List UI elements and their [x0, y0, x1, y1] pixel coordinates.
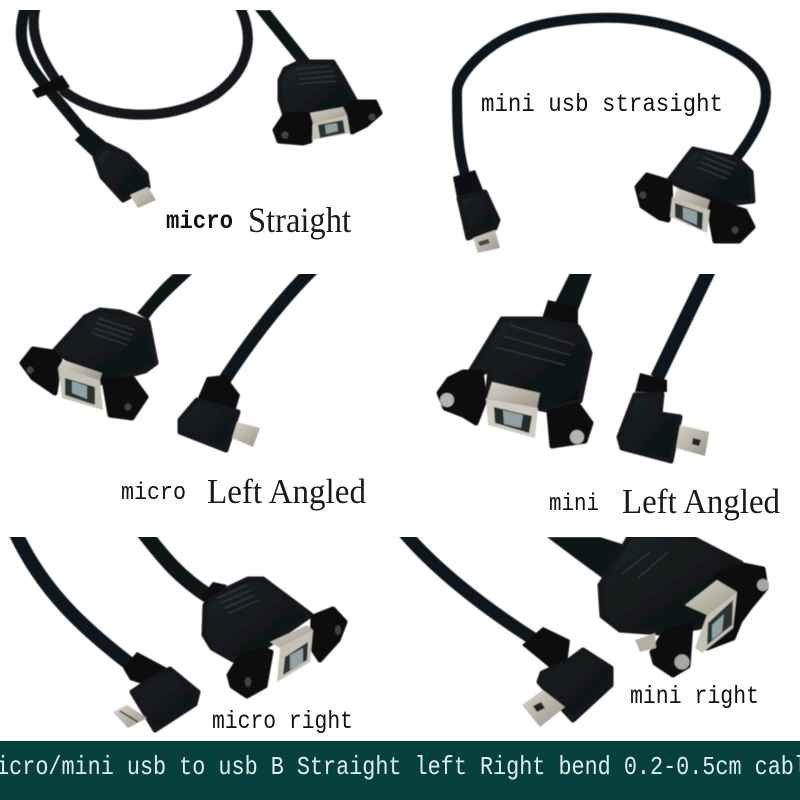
label: micro Left Angled: micro [121, 480, 186, 507]
panel: micro straight [21, 0, 380, 240]
panel-mount USB B socket [138, 525, 345, 696]
banner [0, 741, 800, 800]
panel: mini straight [453, 18, 766, 253]
panel-mount USB B socket [637, 149, 753, 241]
panel-mount USB B socket [255, 10, 380, 143]
label: micro Straight: Straight [248, 200, 351, 240]
label: mini right: mini right [630, 682, 759, 711]
angled micro plug [180, 262, 320, 450]
panel-mount USB B socket with screws [439, 273, 592, 446]
panel: micro left angled [22, 262, 366, 511]
angled micro plug with cable [12, 525, 198, 730]
panel-mount USB B socket [22, 274, 192, 418]
label: mini Left Angled: Left Angled [622, 482, 780, 521]
label: mini Left Angled [549, 482, 780, 521]
looped cable [457, 18, 766, 175]
label: mini Left Angled: mini [549, 491, 599, 518]
panel: mini right [398, 525, 769, 727]
label: mini usb strasight: mini usb strasight [481, 90, 723, 119]
label: micro Left Angled [121, 472, 366, 511]
angled mini plug with cable [398, 525, 611, 727]
mini USB plug [453, 170, 500, 253]
label: micro right: micro right [212, 707, 353, 736]
angled mini plug [619, 260, 714, 461]
panel: mini left angled [439, 260, 780, 521]
label: micro Straight [166, 200, 351, 240]
label: micro Straight: micro [166, 207, 233, 236]
panel-mount USB B socket with screws [547, 535, 769, 675]
looped cable with micro plug [21, 0, 248, 208]
panel: micro right [12, 525, 353, 736]
label: micro Left Angled: Left Angled [207, 472, 366, 511]
